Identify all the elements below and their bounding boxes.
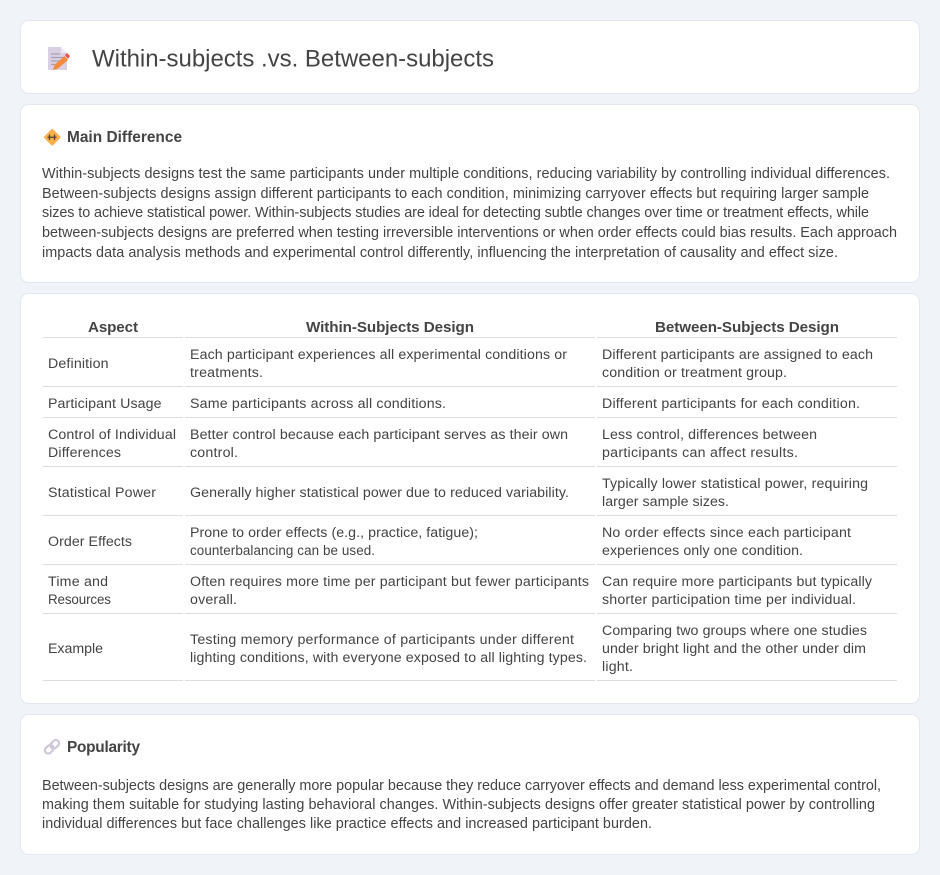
panel: popularity <box>20 714 920 854</box>
row: control of individual differences: Differences <box>48 445 121 461</box>
text block: main difference: Between-subjects designs assign different participants to each condition, minimizing carryover effects but requiring larger sample <box>42 186 869 202</box>
row: order effects: Prone to order effects (e.g., practice, fatigue); <box>190 525 478 541</box>
row: control of individual differences <box>48 427 817 461</box>
row: order effects: Order Effects <box>48 534 132 550</box>
row: control of individual differences: Less control, differences between <box>602 427 817 443</box>
row: definition: treatments. <box>190 365 263 381</box>
panel: header <box>20 20 920 94</box>
table header <box>88 319 839 336</box>
row: statistical power: Statistical Power <box>48 485 156 501</box>
row: time and resources: shorter participation time per individual. <box>602 592 856 608</box>
icon: chain link <box>44 739 60 755</box>
heading: popularity: Popularity <box>67 739 140 756</box>
row: definition <box>48 347 873 381</box>
row: time and resources: Can require more participants but typically <box>602 574 873 590</box>
table header: Between-Subjects Design <box>655 319 839 336</box>
panel: main difference <box>20 104 920 282</box>
row: time and resources <box>48 574 873 608</box>
table header: Aspect <box>88 319 138 336</box>
row: participant usage: Same participants across all conditions. <box>190 396 446 412</box>
row: example: light. <box>602 659 633 675</box>
row: example: Comparing two groups where one studies <box>602 623 867 639</box>
row: order effects: No order effects since each participant <box>602 525 851 541</box>
row: control of individual differences: participants can affect results. <box>602 445 798 461</box>
row: statistical power: larger sample sizes. <box>602 494 729 510</box>
row: participant usage: Participant Usage <box>48 396 162 412</box>
row: statistical power: Typically lower statistical power, requiring <box>602 476 868 492</box>
row: definition: condition or treatment group. <box>602 365 787 381</box>
row: example <box>48 623 867 675</box>
text block: main difference: sizes to achieve statistical power. Within-subjects studies are ideal for detecting subtle changes over time or treatment effects, while <box>42 205 869 221</box>
table header: Within-Subjects Design <box>306 319 474 336</box>
icon: document with pencil <box>48 47 70 70</box>
row: example: Example <box>48 641 103 657</box>
row: time and resources: overall. <box>190 592 237 608</box>
row: order effects <box>48 525 851 559</box>
row: definition: Definition <box>48 356 108 372</box>
text block: main difference: between-subjects designs are preferred when testing irreversible interventions or when order effects could bias results. Each approach <box>42 225 897 241</box>
row: time and resources: Often requires more time per participant but fewer participants <box>190 574 589 590</box>
heading: main difference: Main Difference <box>67 129 182 146</box>
row: example: lighting conditions, with everyone exposed to all lighting types. <box>190 650 587 666</box>
text block: popularity: Between-subjects designs are generally more popular because they reduce carryover effects and demand less experimental control, <box>42 778 881 794</box>
row: participant usage <box>48 396 860 412</box>
text block: popularity: individual differences but face challenges like practice effects and increased participant burden. <box>42 816 652 832</box>
row: time and resources: Time and <box>48 574 108 590</box>
row: control of individual differences: Better control because each participant serves as their own <box>190 427 568 443</box>
row: definition: Different participants are assigned to each <box>602 347 873 363</box>
row: order effects: counterbalancing can be used. <box>190 543 375 558</box>
row: statistical power <box>48 476 868 510</box>
title: Within-subjects .vs. Between-subjects <box>92 46 494 72</box>
text block: main difference <box>42 166 897 261</box>
row: example: under bright light and the other under dim <box>602 641 866 657</box>
text block: main difference: Within-subjects designs test the same participants under multiple conditions, reducing variability by controlling individual differences. <box>42 166 890 182</box>
row: statistical power: Generally higher statistical power due to reduced variability. <box>190 485 569 501</box>
row: order effects: experiences only one condition. <box>602 543 803 559</box>
row: definition: Each participant experiences all experimental conditions or <box>190 347 567 363</box>
panel: comparison table <box>20 294 920 704</box>
row: participant usage: Different participants for each condition. <box>602 396 860 412</box>
row: time and resources: Resources <box>48 592 111 607</box>
text block: main difference: impacts data analysis methods and experimental control differently, influencing the interpretation of causality and effect size. <box>42 245 838 261</box>
text block: popularity <box>42 778 881 832</box>
row: example: Testing memory performance of participants under different <box>190 632 574 648</box>
row: control of individual differences: Control of Individual <box>48 427 176 443</box>
row: control of individual differences: control. <box>190 445 238 461</box>
icon: warning diamond <box>43 128 61 146</box>
text block: popularity: making them suitable for studying lasting behavioral changes. Within-subjects designs offer greater statistical power by controlling <box>42 797 875 813</box>
